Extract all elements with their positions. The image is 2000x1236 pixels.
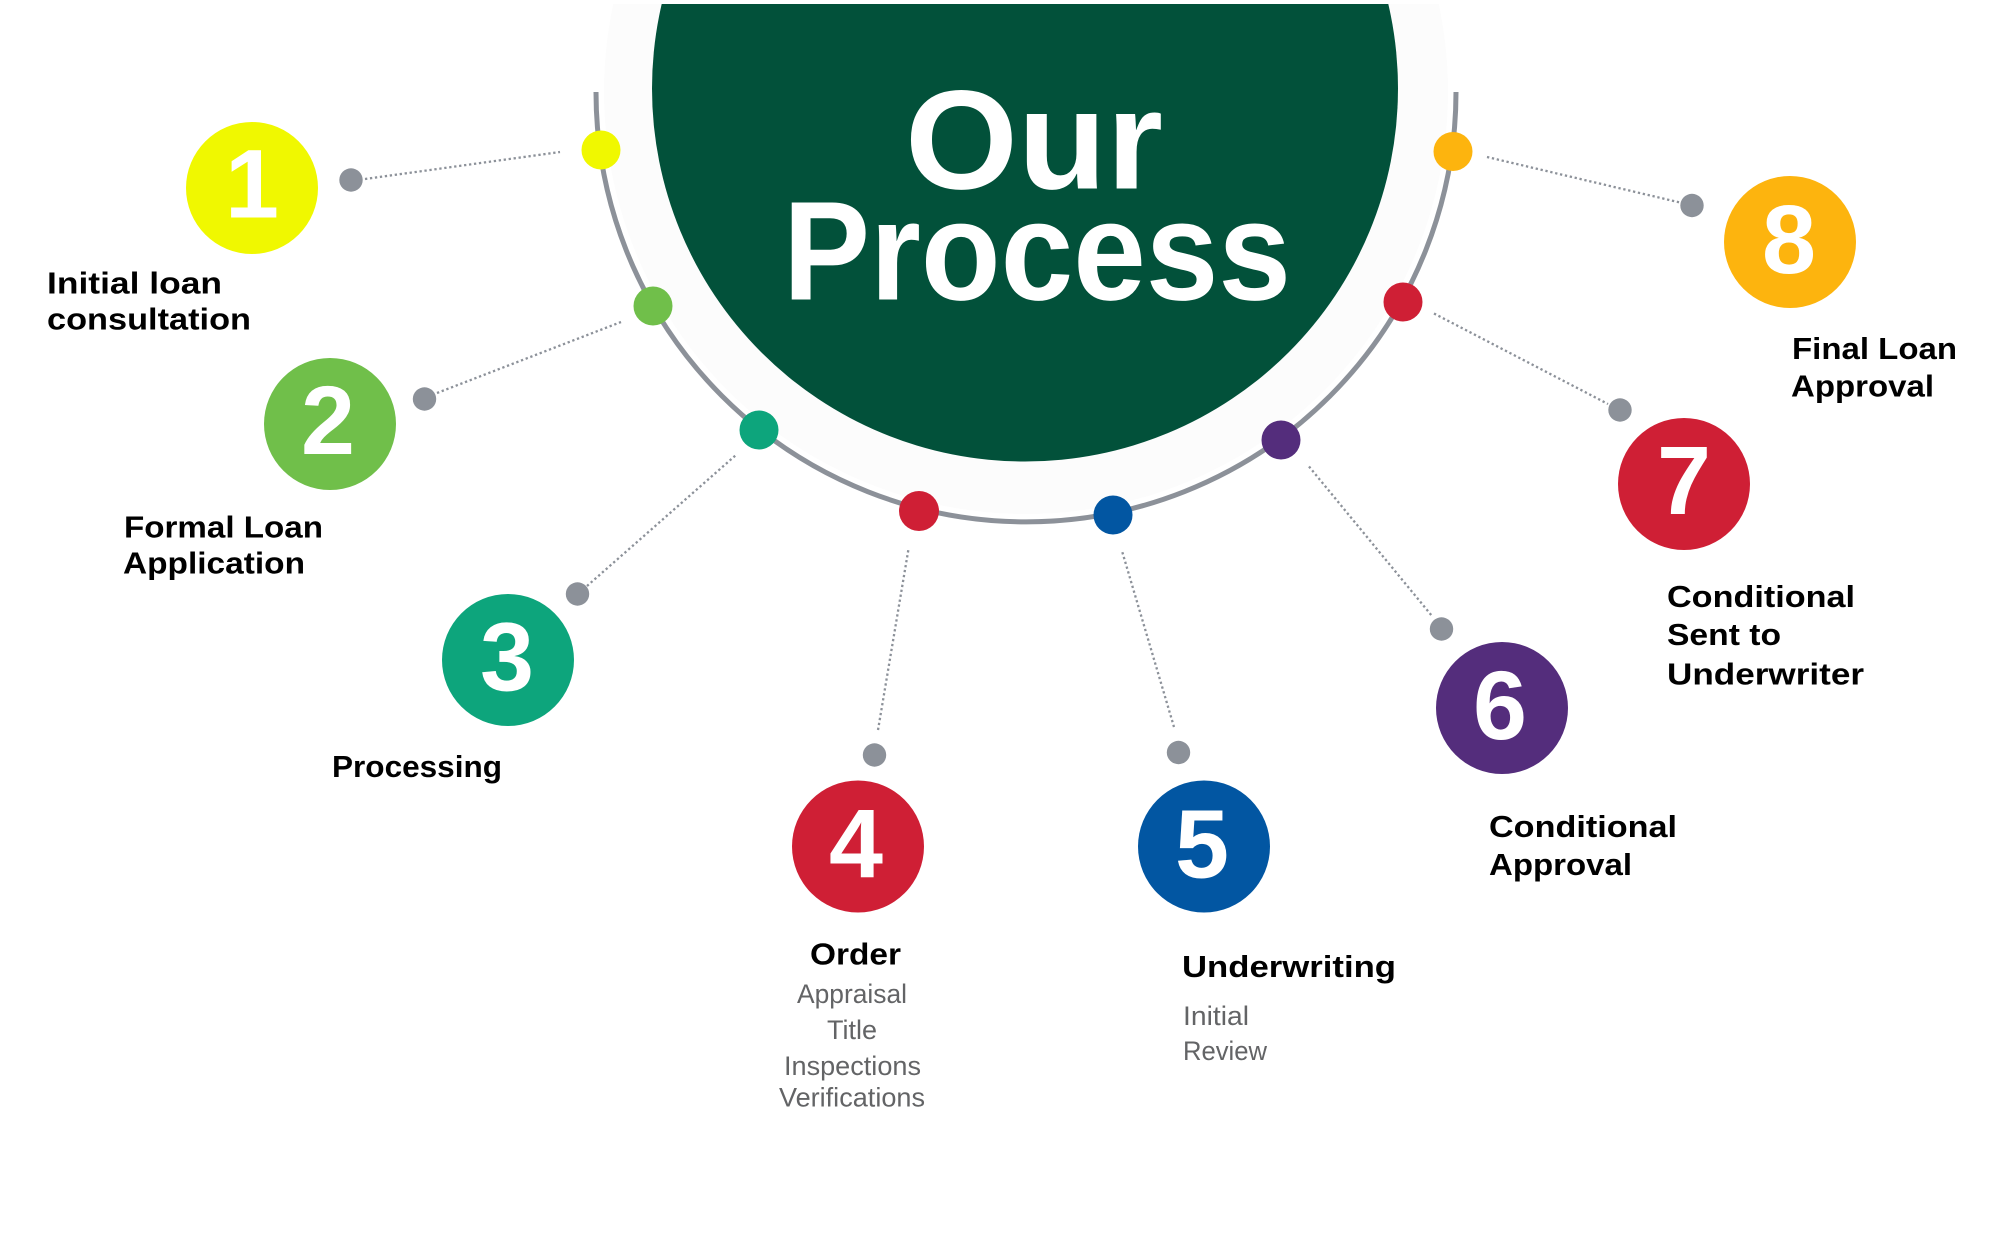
step 4: order: Inspections [784, 1051, 921, 1081]
step 7: conditional sent to underwriter: Conditional [1667, 579, 1855, 614]
step 4: order: Order [810, 936, 901, 972]
step 8: final loan approval: Final Loan [1792, 331, 1957, 366]
step 4: order: Appraisal [797, 979, 907, 1009]
step 4: order [779, 491, 939, 1112]
step 2: formal loan application: Application [123, 546, 305, 580]
step 4: order: 4 [829, 789, 883, 898]
step 7: conditional sent to underwriter [1384, 282, 1864, 692]
title [783, 60, 1291, 330]
central semicircle panel [596, 0, 1456, 522]
step 8: final loan approval: Approval [1791, 368, 1934, 404]
step 3: processing: 3 [480, 602, 534, 712]
step 6: conditional approval: 6 [1473, 651, 1527, 760]
step 5: underwriting: 5 [1175, 790, 1229, 898]
step 2: formal loan application [123, 286, 672, 580]
step 6: conditional approval: Approval [1489, 847, 1632, 882]
step 2: formal loan application: 2 [301, 366, 355, 475]
title: Process [783, 172, 1291, 330]
title: Our [905, 60, 1163, 218]
step 5: underwriting: Review [1183, 1036, 1267, 1066]
step 3: processing [332, 410, 778, 784]
step 4: order: Title [827, 1015, 877, 1045]
step 5: underwriting: Initial [1183, 1001, 1249, 1031]
step 5: underwriting: Underwriting [1182, 949, 1396, 984]
step 1: initial loan consultation: 1 [225, 130, 279, 238]
step 3: processing: Processing [332, 749, 502, 784]
step 6: conditional approval [1262, 420, 1677, 882]
step 1: initial loan consultation: Initial loan [47, 266, 222, 300]
step 8: final loan approval [1434, 132, 1957, 404]
step 1: initial loan consultation [47, 122, 620, 336]
step 1: initial loan consultation: consultation [47, 302, 251, 336]
step 6: conditional approval: Conditional [1489, 809, 1677, 844]
step 7: conditional sent to underwriter: Underwriter [1667, 656, 1864, 692]
step 2: formal loan application: Formal Loan [124, 510, 323, 544]
step 7: conditional sent to underwriter: Sent to [1667, 617, 1781, 652]
step 7: conditional sent to underwriter: 7 [1657, 426, 1711, 535]
step 5: underwriting [1094, 496, 1396, 1066]
step 8: final loan approval: 8 [1762, 185, 1816, 294]
step 4: order: Verifications [779, 1082, 925, 1112]
